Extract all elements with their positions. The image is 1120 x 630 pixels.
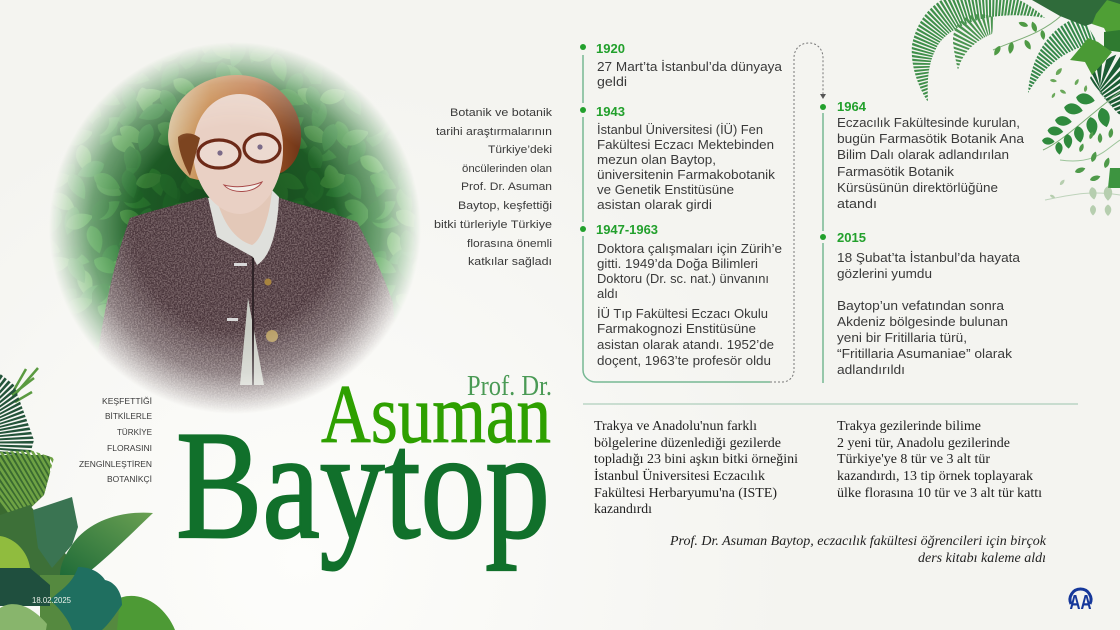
text block: collections: Fakültesi Herbaryumu'na (ISTE) (594, 486, 777, 501)
jacket details (227, 258, 278, 385)
bottom green leaf (117, 596, 175, 630)
side caption: BOTANİKÇİ (107, 474, 152, 484)
small scattered leaves (1050, 67, 1088, 99)
timeline entry 2015: “Fritillaria Asumaniae” olarak (837, 347, 1013, 361)
timeline entry 1920 (596, 41, 782, 89)
intro paragraph: Prof. Dr. Asuman (461, 181, 552, 193)
timeline entry 1947-1963: Doktora çalışmaları için Zürih’e (597, 242, 782, 256)
timeline entry 1964: Farmasötik Botanik (837, 165, 955, 179)
intro paragraph: tarihi araştırmalarının (436, 126, 552, 138)
hair side left (178, 133, 200, 176)
date: 18.02.2025 (32, 596, 72, 605)
text block: new species: 2 yeni tür, Anadolu gezilerinde (837, 436, 1010, 451)
side caption: ZENGİNLEŞTİREN (79, 459, 152, 469)
timeline entry 2015: 2015 (837, 230, 866, 245)
text block: collections: kazandırdı (594, 502, 652, 517)
glasses (198, 134, 280, 168)
shirt strip (240, 298, 264, 385)
intro paragraph: bitki türleriyle Türkiye (434, 219, 552, 231)
bottom-left foliage (0, 368, 175, 630)
jacket (99, 197, 394, 409)
fern 3 (1028, 28, 1096, 93)
title: Asuman (321, 368, 551, 461)
fern 1 (918, 2, 1050, 102)
dark striped leaf (0, 568, 50, 606)
timeline entry 1947-1963: Farmakognozi Enstitüsüne (597, 322, 756, 336)
side caption: BİTKİLERLE (105, 411, 152, 421)
face (193, 94, 283, 214)
intro paragraph: Türkiye’deki (488, 144, 552, 156)
fern 4 (1090, 76, 1120, 118)
timeline entry 2015: Akdeniz bölgesinde bulunan (837, 315, 1008, 329)
green palm frond (0, 455, 55, 520)
branch of large leaves (1042, 92, 1120, 155)
timeline entry 1947-1963: 1947-1963 (596, 222, 658, 237)
timeline entry 2015 (837, 230, 1020, 377)
smile (224, 182, 262, 191)
timeline entry 1920: 27 Mart’ta İstanbul’da dünyaya (597, 60, 782, 74)
text block: new species: Trakya gezilerinde bilime (837, 419, 981, 434)
lower branch (1060, 128, 1120, 182)
ground foliage (40, 575, 130, 630)
side caption: TÜRKİYE (117, 427, 152, 437)
text block: new species: ülke florasına 10 tür ve 3 alt tür kattı (837, 486, 1042, 501)
timeline entry 1943: ve Genetik Enstitüsüne (597, 183, 734, 197)
lime leaf (0, 536, 30, 568)
italic note: ders kitabı kaleme aldı (918, 551, 1046, 566)
timeline entry 1964: Eczacılık Fakültesinde kurulan, (837, 116, 1020, 130)
timeline entry 1964: atandı (837, 197, 877, 211)
text block: new species: Türkiye'ye 8 tür ve 3 alt tür (837, 452, 990, 467)
text block: new species: kazandırdı, 13 tip örnek toplayarak (837, 469, 1033, 484)
timeline entry 1964: bugün Farmasötik Botanik Ana (837, 132, 1024, 146)
intro paragraph (434, 107, 553, 268)
faded lower leaves (1045, 179, 1120, 216)
upper palm leaflets (12, 368, 38, 402)
portrait photo (52, 44, 418, 412)
timeline entry 1964 (837, 99, 1024, 211)
neck (219, 192, 272, 245)
timeline connector: dotted arrow (770, 43, 826, 382)
timeline entry 1943: mezun olan Baytop, (597, 153, 716, 167)
italic note: Prof. Dr. Asuman Baytop, eczacılık fakültesi öğrencileri için birçok (669, 534, 1047, 549)
eyes (217, 144, 263, 156)
timeline entry 1943: İstanbul Üniversitesi (İÜ) Fen (597, 123, 763, 137)
top-right foliage (918, 0, 1120, 216)
timeline entry 2015: 18 Şubat’ta İstanbul’da hayata (837, 251, 1020, 265)
big maple leaf 1 (1092, 0, 1120, 36)
timeline entry 1947-1963: Doktoru (Dr. sc. nat.) ünvanını (597, 272, 769, 286)
timeline entry 1943 (596, 104, 776, 212)
banana leaf (60, 513, 153, 575)
intro paragraph: öncülerinden olan (462, 163, 552, 175)
green square leaf (1108, 168, 1120, 188)
timeline entry 1964: 1964 (837, 99, 867, 114)
text block: collections: Trakya ve Anadolu'nun farklı (594, 419, 757, 434)
title: Prof. Dr. (467, 371, 552, 402)
timeline entry 2015: Baytop’un vefatından sonra (837, 299, 1004, 313)
big maple leaf 2 (1070, 38, 1112, 75)
top dark cluster (1032, 0, 1120, 26)
text block: collections: bölgelerine düzenlediği gezilerde (594, 436, 781, 451)
timeline entry 1964: Bilim Dalı olarak adlandırılan (837, 148, 1009, 162)
timeline entry 1920: 1920 (596, 41, 625, 56)
timeline entry 2015: gözlerini yumdu (837, 267, 932, 281)
leafy background (52, 44, 418, 350)
timeline entry 1943: üniversitenin Farmakobotanik (597, 168, 776, 182)
title: Baytop (176, 399, 550, 571)
timeline entry 1920: geldi (597, 75, 627, 89)
timeline entry 1947-1963 (596, 222, 782, 368)
logo: AA (1070, 589, 1092, 614)
timeline entry 1943: Fakültesi Eczacı Mektebinden (597, 138, 774, 152)
side caption: KEŞFETTİĞİ (102, 396, 152, 406)
timeline connector: right column (822, 113, 824, 383)
pale leaf (0, 604, 47, 630)
timeline markers (580, 44, 826, 240)
timeline connector: left column (583, 55, 770, 382)
sprig (992, 15, 1062, 57)
timeline entry 1964: Kürsüsünün direktörlüğüne (837, 181, 998, 195)
timeline entry 1947-1963: doçent, 1963’te profesör oldu (597, 354, 771, 368)
dark monstera leaf (33, 497, 78, 568)
timeline entry 1947-1963: aldı (597, 287, 618, 301)
fern filler (0, 505, 80, 590)
fern 2 (958, 23, 1000, 72)
text block: collections: topladığı 23 bini aşkın bitki örneğini (594, 452, 798, 467)
text block: collections: İstanbul Üniversitesi Eczacılık (594, 467, 765, 484)
side caption (79, 396, 152, 484)
intro paragraph: Baytop, keşfettiği (458, 200, 552, 212)
text block: new species (837, 419, 1042, 501)
intro paragraph: katkılar sağladı (468, 256, 552, 268)
striped palm frond (0, 380, 25, 470)
timeline entry 1943: 1943 (596, 104, 625, 119)
collar (208, 190, 279, 265)
side caption: FLORASINI (107, 443, 152, 453)
text block: collections (594, 419, 798, 517)
timeline entry 1947-1963: asistan olarak atandı. 1952’de (597, 338, 774, 352)
timeline entry 1947-1963: İÜ Tıp Fakültesi Eczacı Okulu (597, 307, 768, 321)
logo: AA: AA (1070, 592, 1092, 614)
italic note (669, 534, 1047, 566)
big maple leaf 3 (1104, 30, 1120, 52)
intro paragraph: Botanik ve botanik (450, 107, 553, 119)
timeline entry 2015: yeni bir Fritillaria türü, (837, 331, 967, 345)
hair back (168, 75, 301, 190)
timeline entry 1943: asistan olarak girdi (597, 198, 712, 212)
teal monstera (50, 567, 122, 630)
timeline entry 1947-1963: gitti. 1949’da Doğa Bilimleri (597, 257, 758, 271)
intro paragraph: florasına önemli (467, 238, 552, 250)
timeline entry 2015: adlandırıldı (837, 363, 905, 377)
